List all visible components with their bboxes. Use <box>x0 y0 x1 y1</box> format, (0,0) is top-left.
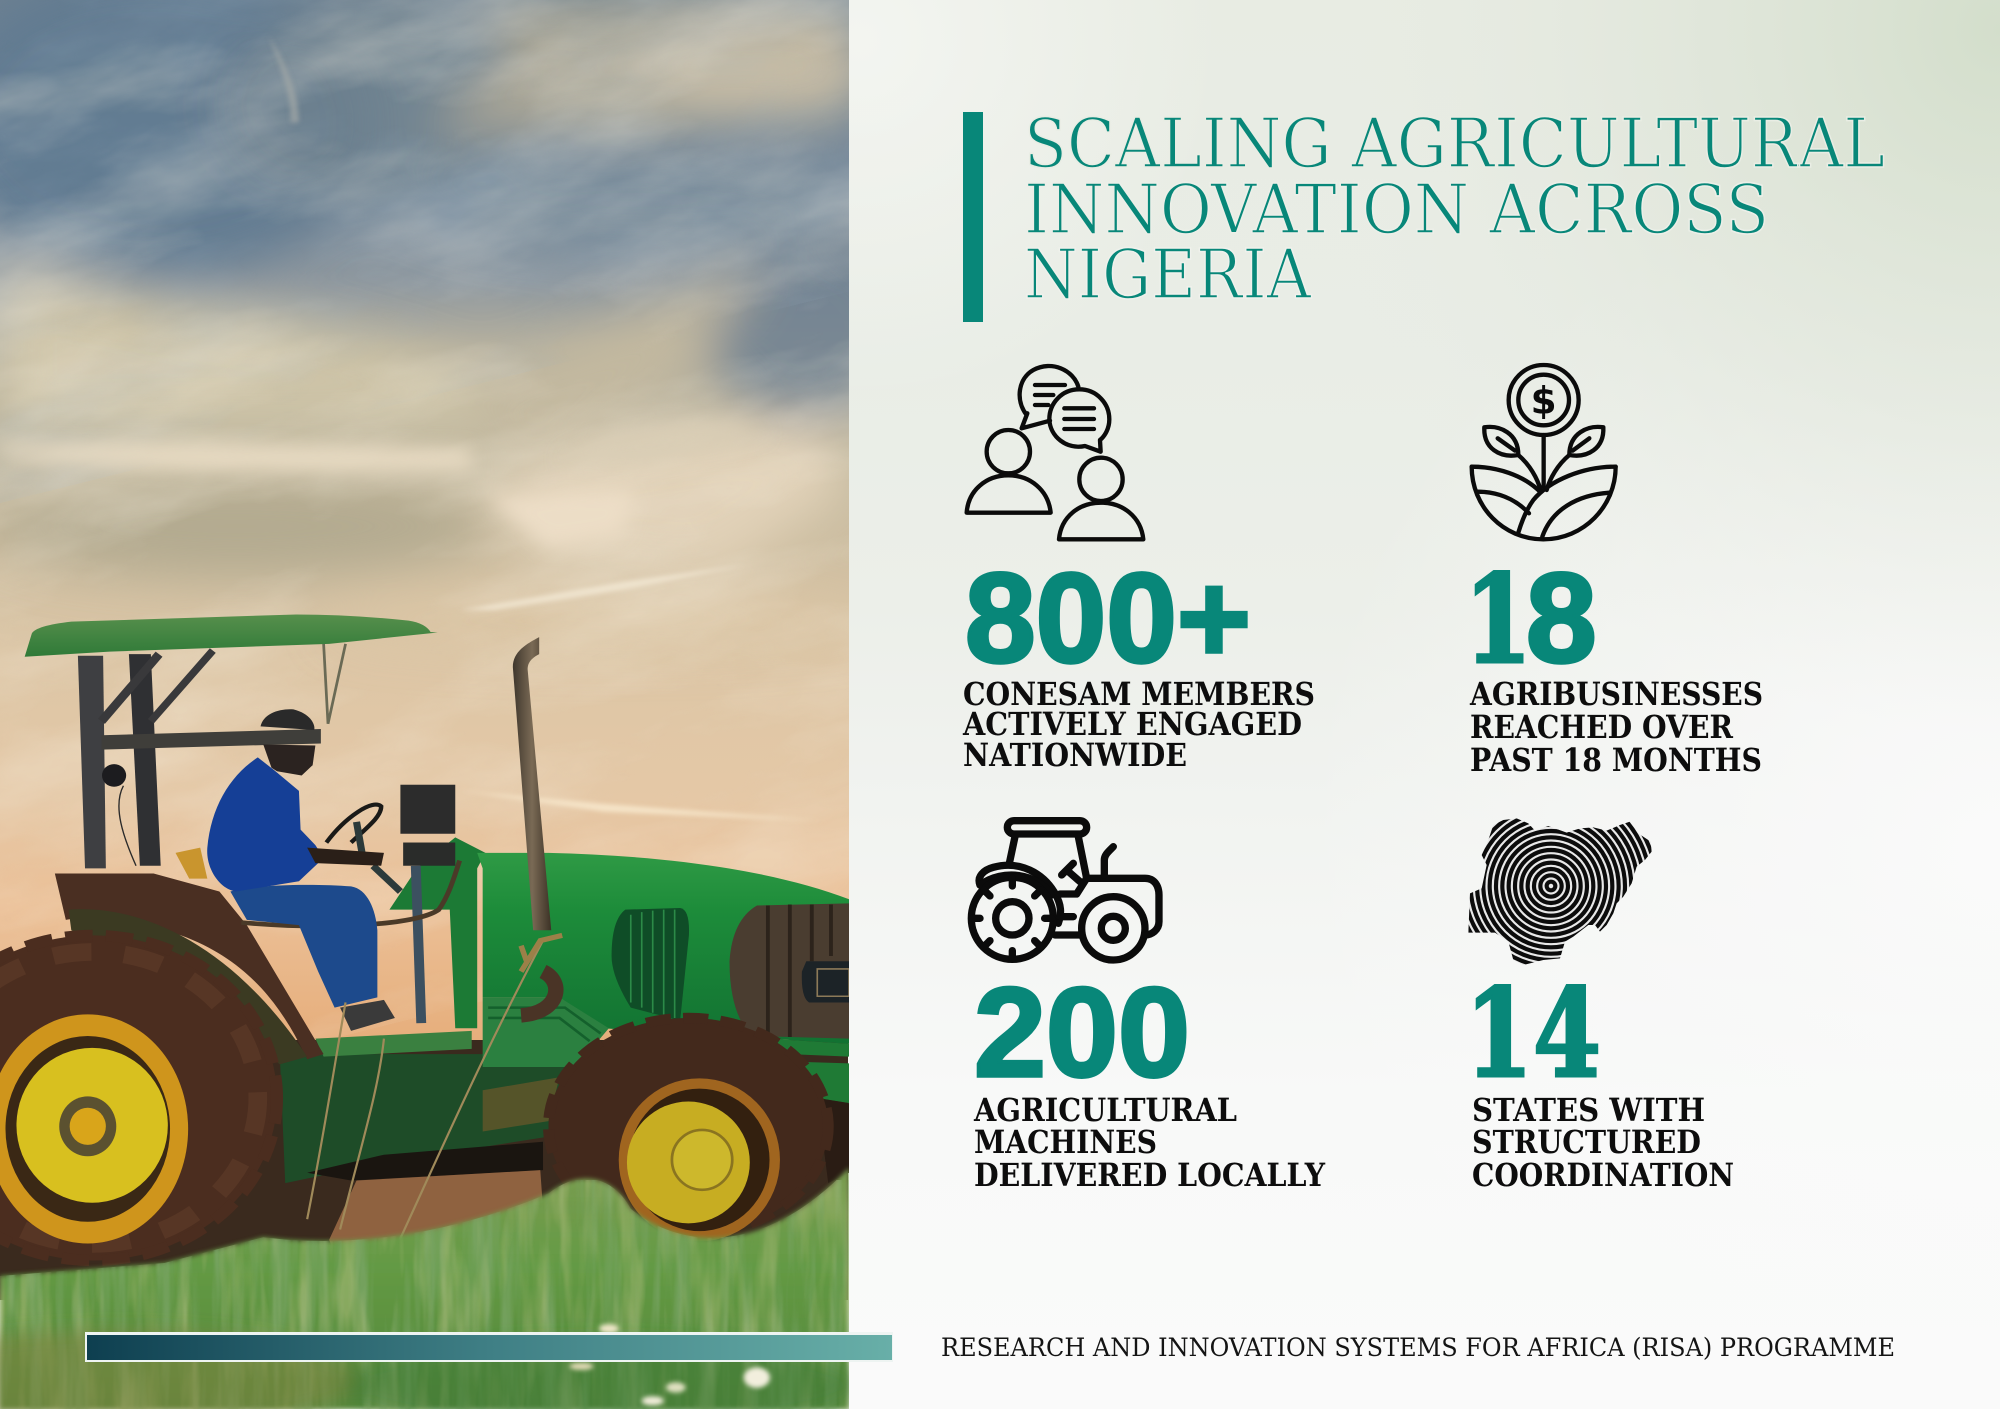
label: CONESAM members actively engaged nationwide: CONESAM MEMBERS <box>963 675 1315 713</box>
label: agricultural machines delivered locally: MACHINES <box>974 1123 1157 1161</box>
stat block: CONESAM members <box>962 366 1315 774</box>
label: CONESAM members actively engaged nationwide: NATIONWIDE <box>963 736 1187 774</box>
label: agricultural machines delivered locally: DELIVERED LOCALLY <box>974 1156 1326 1194</box>
dry grass stalks <box>307 935 562 1250</box>
label: states with structured coordination: COORDINATION <box>1472 1156 1734 1194</box>
title accent bar <box>963 112 983 322</box>
icon: tractor <box>971 821 1159 960</box>
title: NIGERIA <box>1024 235 1312 315</box>
title: INNOVATION ACROSS <box>1024 170 1769 250</box>
icon: Nigeria map with concentric rings <box>1468 818 1652 965</box>
tractor lower body <box>280 997 849 1183</box>
ground under tractor <box>329 1170 543 1266</box>
stat block: states <box>1468 818 1733 1186</box>
label: states with structured coordination: STATES WITH <box>1472 1091 1705 1129</box>
label: CONESAM members actively engaged nationwide <box>962 675 1315 774</box>
label: agribusinesses reached over past 18 months: PAST 18 MONTHS <box>1470 741 1762 779</box>
front wheel <box>549 1018 828 1241</box>
fender and seat <box>55 848 324 1064</box>
rear wheel <box>0 935 277 1260</box>
grass foreground <box>0 1168 860 1409</box>
number: 800+: 800+ <box>965 547 1251 689</box>
tractor canopy frame <box>78 644 346 868</box>
farmer in blue overalls <box>207 709 395 1031</box>
label: agricultural machines delivered locally: AGRICULTURAL <box>973 1091 1237 1129</box>
number: 200: 200 <box>974 961 1190 1103</box>
dark ground behind tractor <box>0 1040 848 1300</box>
icon: dollar coin plant: $ <box>1531 378 1557 422</box>
sky with clouds <box>0 0 849 1044</box>
icon: two people with speech bubbles <box>967 366 1143 539</box>
right panel background <box>849 0 2000 1409</box>
tractor hood <box>389 837 849 1044</box>
label: agribusinesses reached over past 18 months: AGRIBUSINESSES <box>1469 675 1763 713</box>
photo panel: farmer on green tractor at sunset <box>0 0 849 1409</box>
label: agribusinesses reached over past 18 months <box>1469 675 1763 779</box>
label: agribusinesses reached over past 18 months: REACHED OVER <box>1470 708 1733 746</box>
number: 18 <box>1464 547 1597 691</box>
title <box>1024 104 1885 315</box>
stat block: agribusinesses <box>1464 365 1763 779</box>
label: CONESAM members actively engaged nationwide: ACTIVELY ENGAGED <box>962 705 1302 743</box>
label: states with structured coordination: STRUCTURED <box>1472 1123 1701 1161</box>
controls and steering <box>241 785 460 1023</box>
exhaust pipe <box>513 637 556 1015</box>
label: agricultural machines delivered locally <box>973 1091 1326 1194</box>
number: 14: 14 <box>1465 961 1601 1105</box>
footer gradient bar <box>85 1332 893 1362</box>
icon: dollar coin plant <box>1472 365 1616 539</box>
number: 18: 8 <box>1526 547 1597 689</box>
title: SCALING AGRICULTURAL <box>1024 104 1885 184</box>
number: 18: 1 <box>1464 547 1532 691</box>
tractor canopy roof <box>25 614 438 657</box>
label: states with structured coordination <box>1472 1091 1734 1194</box>
tractor <box>0 614 849 1266</box>
footer programme text: RESEARCH AND INNOVATION SYSTEMS FOR AFRICA (RISA) PROGRAMME <box>941 1332 1895 1362</box>
stat block: agricultural machines <box>971 821 1326 1194</box>
